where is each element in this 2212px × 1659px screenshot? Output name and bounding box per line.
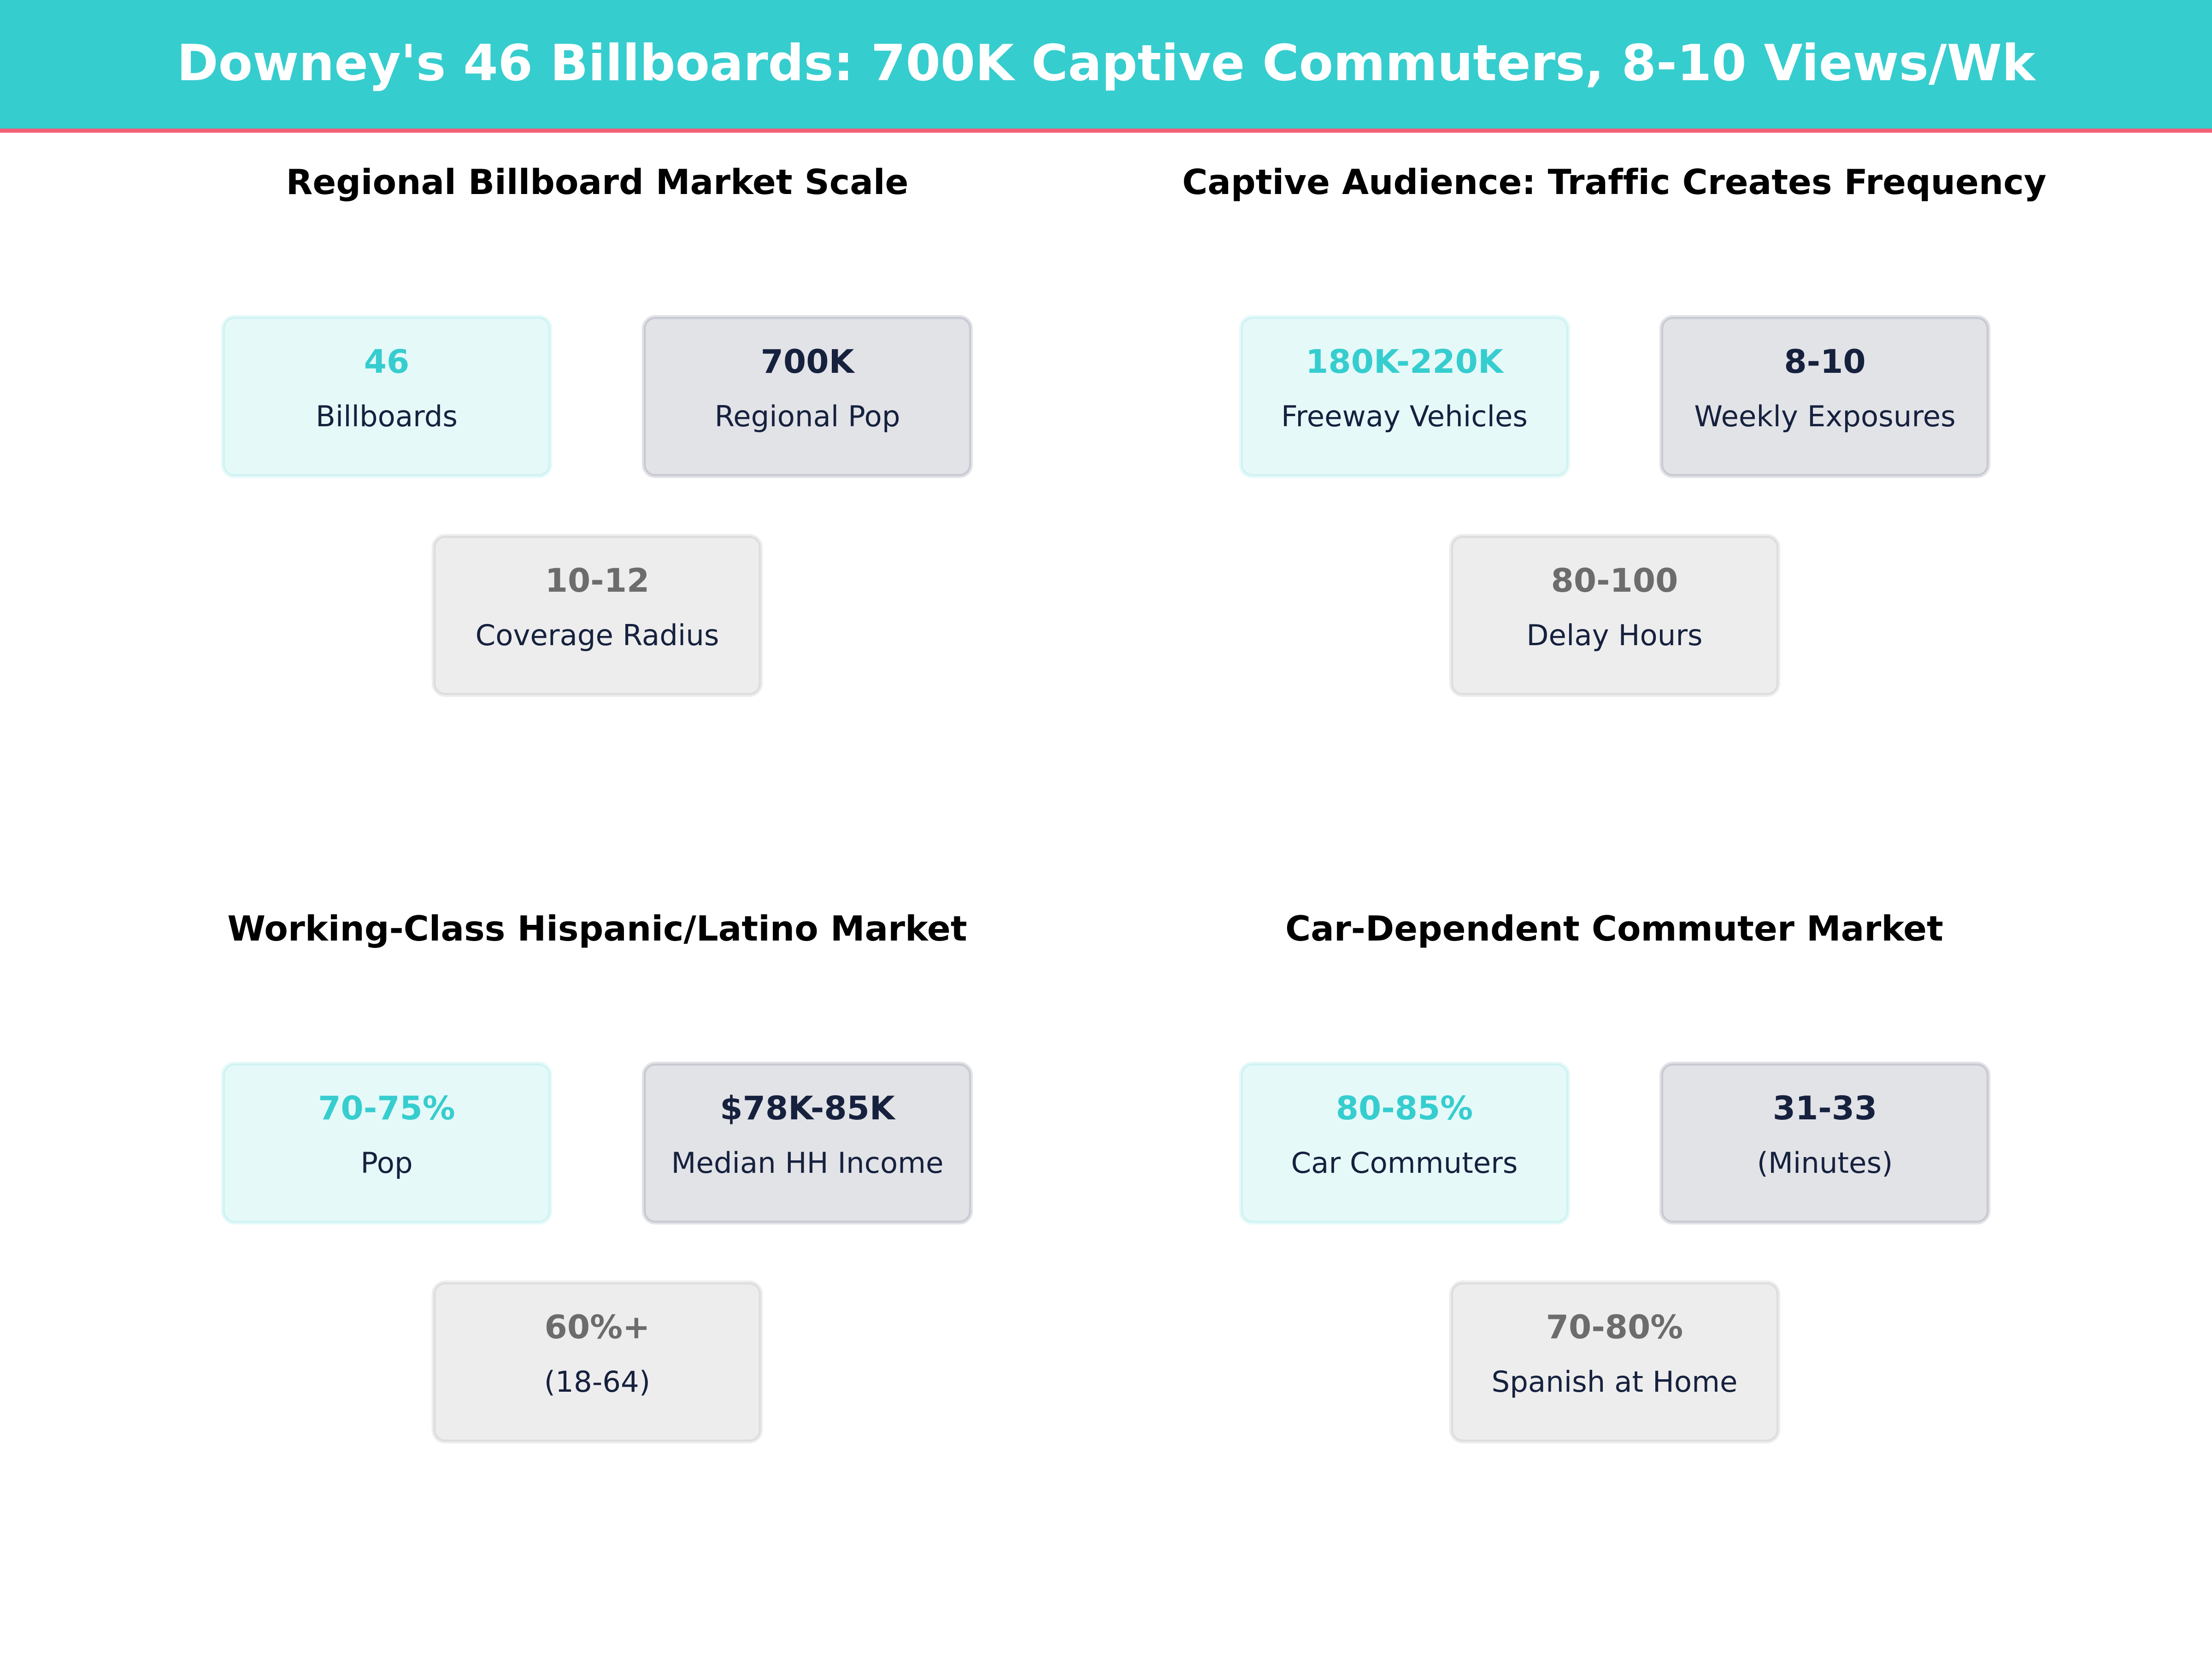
stat card: minutes <box>1661 1064 1988 1223</box>
stat card: spanish at home <box>1451 1282 1778 1441</box>
stat card: ages 18-64: 60%+ <box>545 1308 650 1346</box>
stat card: car commuters: 80-85% <box>1336 1089 1473 1127</box>
stat card: spanish at home: Spanish at Home <box>1492 1365 1737 1399</box>
stat card: 46 billboards: 46 <box>364 342 409 381</box>
stat card: median hh income: $78K-85K <box>720 1089 896 1127</box>
panel heading: Working-Class Hispanic/Latino Market <box>227 908 967 949</box>
stat card: pop share: 70-75% <box>318 1089 455 1127</box>
panel heading: Car-Dependent Commuter Market <box>1285 908 1943 949</box>
stat card: freeway vehicles <box>1241 317 1568 476</box>
stat card: weekly exposures: Weekly Exposures <box>1694 400 1956 433</box>
stat card: 10-12 coverage radius: Coverage Radius <box>476 618 719 652</box>
stat card: median hh income: Median HH Income <box>671 1146 944 1180</box>
panel: car-dependent commuter market <box>1241 908 1988 1441</box>
stat card: pop share: Pop <box>360 1146 413 1180</box>
stat card: car commuters <box>1241 1064 1568 1223</box>
stat card: pop share <box>223 1064 550 1223</box>
panel: working-class hispanic/latino market <box>223 908 971 1441</box>
stat card: delay hours <box>1451 536 1778 695</box>
stat card: delay hours: Delay Hours <box>1526 618 1703 652</box>
stat card: weekly exposures: 8-10 <box>1784 342 1866 381</box>
title: Downey's 46 Billboards: 700K Captive Commuters, 8-10 Views/Wk <box>177 34 2036 92</box>
stat card: 700K regional pop: Regional Pop <box>715 400 900 433</box>
stat card: 700K regional pop <box>644 317 971 476</box>
stat card: weekly exposures <box>1661 317 1988 476</box>
stat card: 46 billboards: Billboards <box>316 400 458 433</box>
stat card: 10-12 coverage radius: 10-12 <box>545 561 649 600</box>
stat card: minutes: 31-33 <box>1773 1089 1877 1127</box>
stat card: 700K regional pop: 700K <box>761 342 855 381</box>
panel heading: Captive Audience: Traffic Creates Frequency <box>1182 162 2047 202</box>
stat card: freeway vehicles: Freeway Vehicles <box>1281 400 1528 433</box>
stat card: median hh income <box>644 1064 971 1223</box>
stat card: ages 18-64: (18-64) <box>544 1365 650 1399</box>
stat card: minutes: (Minutes) <box>1757 1146 1893 1180</box>
stat card: spanish at home: 70-80% <box>1546 1308 1683 1346</box>
stat card: freeway vehicles: 180K-220K <box>1306 342 1505 381</box>
panel: captive audience <box>1182 162 2047 695</box>
stat card: 10-12 coverage radius <box>434 536 761 695</box>
header banner <box>0 0 2212 133</box>
stat card: car commuters: Car Commuters <box>1291 1146 1518 1180</box>
panel heading: Regional Billboard Market Scale <box>286 162 908 202</box>
stat card: ages 18-64 <box>434 1282 761 1441</box>
stat card: 46 billboards <box>223 317 550 476</box>
stat card: delay hours: 80-100 <box>1551 561 1678 600</box>
panel: regional billboard market scale <box>223 162 971 695</box>
